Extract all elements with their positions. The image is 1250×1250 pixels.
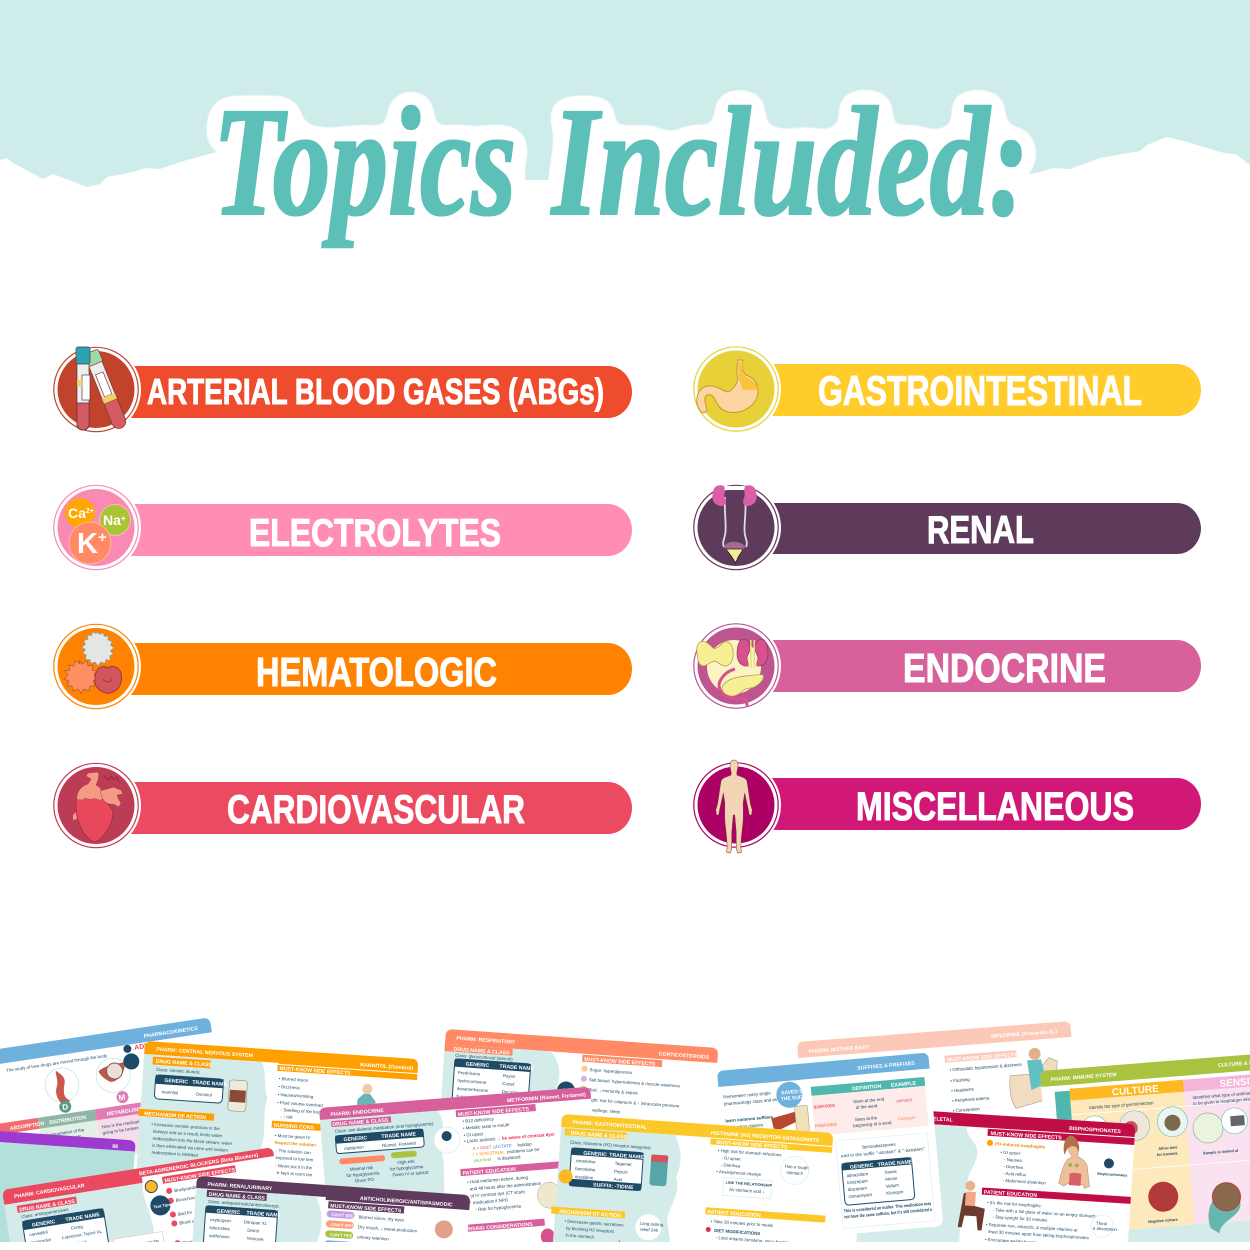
card: gastrointestinal (547, 1114, 833, 1250)
card: endocrine: Class: anti-diabetic medication (oral hypoglycemic) (335, 1121, 434, 1134)
card: immune system: PHARM: IMMUNE SYSTEM (1051, 1072, 1117, 1083)
card: suffixes and prefixes: Benzodiazepines (862, 1142, 897, 1150)
card: renal urinary: GENERIC (216, 1208, 241, 1216)
title: Included: (550, 75, 1029, 248)
card: gastrointestinal: • Decreases gastric secretions (564, 1218, 625, 1228)
card: endocrine: Riomet, Fortamet (382, 1140, 417, 1148)
card: immune system: Allow time (1158, 1145, 1178, 1151)
card: respiratory: Salt based: hypernatremia & muscle weakness (589, 1077, 681, 1089)
banner: arterial blood gases (130, 366, 632, 418)
icon: endocrine organs (691, 621, 781, 711)
card: central nervous system: • Nausea/vomiting (278, 1092, 314, 1099)
card: pharmacokinetics: M (118, 1093, 126, 1103)
card: respiratory: hydrocortisone (457, 1078, 487, 1085)
card: mother baby: • Peripheral edema (952, 1095, 990, 1103)
card: suffixes and prefixes: THE SUFFIX (780, 1094, 811, 1103)
card: mother baby: PHARM: MOTHER BABY (809, 1044, 870, 1055)
card: cardiovascular: Coreg (70, 1224, 84, 1231)
icon: stomach (691, 344, 781, 434)
icon: electrolyte bubbles: Na (103, 512, 121, 528)
card: pharmacokinetics: PHARMACOKINETICS (143, 1026, 199, 1040)
card: endocrine: • Metallic taste in mouth (463, 1122, 510, 1131)
card: suffixes and prefixes: alprazolam (846, 1171, 869, 1178)
card: central nervous system: • Must be given IV (275, 1133, 311, 1140)
card: pharmacokinetics: How is the medication (101, 1118, 145, 1130)
card: renal urinary: PHARM: RENAL/URINARY (207, 1182, 273, 1192)
card: gastrointestinal: by blocking H2 receptors (566, 1226, 615, 1234)
card: purple back card (0, 1131, 136, 1242)
card: endocrine: NURSING CONSIDERATIONS (461, 1222, 534, 1233)
card: immune system: for bacteria (1157, 1151, 1179, 1157)
card: gastrointestinal: - GI upset (721, 1155, 742, 1162)
card: pharmacokinetics: Transportation of the (44, 1127, 85, 1138)
icon: blood tubes (51, 344, 141, 434)
card: gastrointestinal: GENERIC (583, 1151, 607, 1158)
card: respiratory: Salt: water & salt retention (586, 1117, 638, 1126)
banner: electrolytes (130, 504, 632, 556)
card: central nervous system: NURSING CONS (273, 1123, 315, 1131)
card: pharmacokinetics (0, 1018, 212, 1154)
card: renal urinary: ANTICHOLINERGIC/ANTISPASMODIC (360, 1196, 453, 1208)
card: renal urinary: CAN'T SEE (331, 1212, 354, 1219)
card: endocrine: • B12 deficiency (462, 1116, 495, 1124)
card: mother baby: MONITOR (955, 1137, 977, 1143)
card: gastrointestinal: As stomach acid ↓ (729, 1187, 765, 1194)
card: renal urinary: Vesicare (247, 1236, 264, 1242)
card: central nervous system: Inspect the solution (274, 1140, 316, 1148)
card: musculoskeletal: PO-induced esophagitis (995, 1141, 1046, 1149)
card: gastrointestinal: TRADE NAME (609, 1152, 644, 1161)
banner: endocrine (770, 640, 1201, 692)
icon: kidneys and bladder (691, 482, 781, 572)
card: endocrine: problems can be (507, 1147, 540, 1154)
card: gastrointestinal: SUFFIX: -TIDINE (593, 1182, 634, 1191)
card: endocrine: • Hold metformin before, during (467, 1175, 529, 1185)
card: central nervous system (136, 1041, 418, 1176)
card: gastrointestinal: HISTAMINE (H2) RECEPTOR ANTAGONISTS (711, 1130, 820, 1144)
card: respiratory: MUST-KNOW SIDE EFFECTS (584, 1057, 656, 1068)
card: endocrine: is displaced (497, 1154, 521, 1161)
card: pharmacokinetics: DISTRIBUTION (49, 1115, 87, 1126)
card: central nervous system: kidneys and as a result, limits water (153, 1129, 223, 1138)
card: gastrointestinal: Class: histamine (H2) receptor antagonist (570, 1140, 652, 1150)
card: central nervous system: PHARM: CENTRAL NERVOUS SYSTEM (156, 1047, 253, 1059)
card: gastrointestinal: LINK THE RELATIONSHIP (725, 1181, 773, 1188)
card: mother baby: • Headache (951, 1087, 975, 1093)
card: cardiovascular: Bradycardia (174, 1184, 198, 1193)
card: suffixes and prefixes (717, 1053, 943, 1244)
card: endocrine: • GI upset (463, 1131, 484, 1138)
card: central nervous system: - Swelling of the body, feet (281, 1107, 333, 1116)
label: hematologic: HEMATOLOGIC (256, 649, 497, 695)
card: endocrine: and 48 hours after the administration (470, 1181, 542, 1191)
card: central nervous system: • Dizziness (278, 1084, 301, 1090)
card: renal urinary: CAN'T PEE (330, 1232, 353, 1238)
card: central nervous system: MECHANISM OF ACTION (144, 1111, 206, 1121)
card: suffixes and prefixes: pharmacology class and as a (724, 1097, 781, 1107)
study card collage (0, 1017, 1250, 1250)
card: gastrointestinal: • Anxiety/mood change (716, 1169, 762, 1177)
card: musculoskeletal: - Take with a full glass of water on an empty stomach (993, 1207, 1096, 1219)
card: musculoskeletal: • It's the risk for esophagitis: (987, 1200, 1042, 1208)
card: gastrointestinal: • Take 30 minutes prior to meals (711, 1219, 774, 1228)
topic: hematologic (51, 622, 632, 712)
topic: cardiovascular (51, 760, 632, 850)
card: endocrine: MUST-KNOW SIDE EFFECTS (458, 1106, 530, 1118)
card: endocrine: - Risk for hypoglycemia (475, 1203, 522, 1212)
card: pharmacokinetics: drug through fluids (45, 1134, 82, 1144)
card: gastrointestinal: PATIENT EDUCATION (707, 1209, 761, 1219)
card: endocrine: I = INTESTINAL (473, 1150, 505, 1157)
card: central nervous system: reabsorption into the blood stream; water (152, 1136, 233, 1146)
card: suffixes and prefixes: lorazepam (847, 1178, 868, 1185)
card: endocrine (319, 1087, 602, 1250)
card: gastrointestinal: - Diarrhea (721, 1162, 741, 1169)
card: renal urinary: oxybutynin (210, 1217, 232, 1224)
card: respiratory: TRADE NAME (499, 1064, 535, 1072)
card: purple back card: 88 (112, 1144, 118, 1150)
card: endocrine: METFORMIN (Riomet, Fortamet) (507, 1092, 586, 1104)
card: cardiovascular: DRUG NAME & CLASS (19, 1199, 76, 1213)
card: suffixes and prefixes: Klonopin (886, 1189, 904, 1196)
card: endocrine: buildup (517, 1141, 532, 1148)
icon: electrolyte bubbles: K (77, 528, 98, 560)
card: musculoskeletal: least 30 minutes apart from taking bisphosphonates (988, 1229, 1090, 1240)
card: gastrointestinal: famotidine (575, 1166, 596, 1173)
card: endocrine: for hypoglycemia (346, 1170, 380, 1178)
card: musculoskeletal: MUST-KNOW SIDE EFFECTS (990, 1131, 1062, 1141)
card: gastrointestinal: nizatidine (574, 1174, 594, 1180)
card: central nervous system: DRUG NAME & CLASS (155, 1059, 212, 1069)
card: immune system: Sample is looked at (1203, 1149, 1239, 1155)
card: suffixes and prefixes: of the word (855, 1103, 878, 1110)
card: suffixes and prefixes: Remember! many single (723, 1090, 771, 1100)
card: central nervous system: • Increases osmotic pressure in the (151, 1122, 220, 1131)
card: musculoskeletal: PATIENT EDUCATION (984, 1190, 1038, 1199)
card: gastrointestinal: PHARM: GASTROINTESTINAL (572, 1120, 648, 1131)
card: renal urinary: tolterodine (209, 1225, 231, 1231)
banner: miscellaneous (770, 778, 1201, 830)
topic: miscellaneous (691, 760, 1201, 853)
card: respiratory: Sleep/legs: sleep (587, 1107, 621, 1114)
card: pharmacokinetics: The study of how drugs are moved through the body (6, 1053, 108, 1073)
card: respiratory: Rayos (503, 1073, 516, 1079)
card: respiratory: the 5 S's (560, 1088, 576, 1094)
card: mother baby: • Constipation (953, 1106, 981, 1113)
topic: renal (691, 482, 1201, 572)
card: cardiovascular: metoprolol (30, 1237, 51, 1245)
card: suffixes and prefixes: GENERIC (850, 1163, 874, 1171)
card: endocrine: Given IV or subcut (392, 1170, 429, 1177)
icon: electrolyte bubbles: Ca (68, 505, 86, 521)
card: cardiovascular: Blood sugar (179, 1217, 203, 1226)
card: suffixes and prefixes: learn common suffixes (725, 1114, 774, 1123)
card: endocrine: for hypoglycemia (390, 1164, 424, 1172)
card: renal urinary: CAN'T SPIT (331, 1222, 355, 1229)
card: central nervous system: - Never put it in the (275, 1163, 313, 1170)
card: musculoskeletal: BISPHOSPHONATES (1069, 1126, 1121, 1135)
label: gastrointestinal: GASTROINTESTINAL (818, 367, 1142, 414)
topic: arterial blood gases (51, 344, 632, 434)
card: cardiovascular: Lopressor, Toprol XL (62, 1229, 103, 1240)
card: cardiovascular: Class: antihypertensives (21, 1207, 70, 1219)
card: musculoskeletal (856, 1107, 1135, 1250)
card: pharmacokinetics: D (62, 1102, 69, 1112)
card: gastrointestinal: stomach (786, 1170, 804, 1176)
card: cardiovascular: Bad for (178, 1210, 193, 1217)
banner: renal (770, 503, 1201, 554)
card: musculoskeletal: • Encourage weight bearing exercises (985, 1237, 1059, 1246)
icon: electrolyte bubbles (51, 482, 141, 572)
icon: blood cells (51, 622, 141, 712)
card: suffixes and prefixes: Xanax (884, 1169, 898, 1175)
card: musculoskeletal: • GI upset: (1000, 1150, 1021, 1156)
card: gastrointestinal: DIET MODIFICATIONS (714, 1228, 760, 1236)
banner: gastrointestinal (770, 364, 1201, 416)
card: gastrointestinal: cimetidine (576, 1158, 596, 1164)
card: immune system: CULTURE (1112, 1084, 1160, 1098)
card: renal urinary: solifenacin (209, 1233, 230, 1239)
card: renal urinary: Class: antispasmodic/anticholinergic (208, 1199, 280, 1209)
card: mother baby: NURSING CONSIDERATIONS (954, 1121, 1027, 1132)
card: immune system (1040, 1049, 1250, 1250)
card: mother baby: • Flushing (950, 1077, 970, 1083)
banner: cardiovascular (130, 782, 632, 834)
card: cardiovascular: Bronchoconstriction (175, 1192, 215, 1203)
card: endocrine: metformin (344, 1145, 364, 1151)
card: musculoskeletal: - Acid reflux (1003, 1171, 1027, 1177)
card: cardiovascular: PHARM: CARDIOVASCULAR (14, 1183, 85, 1200)
card: renal urinary: DRUG NAME & CLASS (209, 1192, 266, 1202)
card: respiratory: GENERIC (465, 1061, 490, 1069)
icon: electrolyte bubbles: + (98, 529, 107, 546)
card: cardiovascular: Blood (182, 1239, 195, 1245)
card: suffixes and prefixes: DEFINITION (852, 1084, 882, 1092)
card: suffixes and prefixes: diazepam (848, 1185, 867, 1192)
card: suffixes and prefixes: Captopril (898, 1115, 916, 1121)
icon: human body (691, 760, 781, 853)
card: central nervous system: - ↑ HR (280, 1114, 293, 1120)
card: central nervous system: is then eliminated via urine and sodium (152, 1143, 228, 1153)
card: cardiovascular (2, 1148, 277, 1242)
card: respiratory: dexamethasone (457, 1086, 489, 1093)
card: suffixes and prefixes: EXAMPLE (891, 1081, 917, 1089)
card: musculoskeletal: - Diarrhea (1003, 1164, 1024, 1170)
card: renal urinary: urinary retention (357, 1234, 390, 1242)
title: Topics (213, 75, 516, 248)
card: gastrointestinal: - Limit irritants (smoking, spicy foods) (716, 1235, 789, 1245)
card: gastrointestinal: Has a tough (785, 1164, 809, 1170)
card: cardiovascular: BETA-ADRENERGIC BLOCKERS (Beta Blockers) (139, 1153, 259, 1177)
card: central nervous system: Class: osmotic diuretic (156, 1067, 201, 1075)
card: endocrine: your liver (473, 1157, 492, 1163)
card: respiratory: Sugar: hyperglycemia (589, 1067, 633, 1075)
card: respiratory: Cortef (502, 1081, 515, 1087)
card: suffixes and prefixes: atenolol (896, 1097, 912, 1103)
card: gastrointestinal: MUST-KNOW SIDE EFFECTS (716, 1140, 788, 1151)
card: mother baby: NIFEDIPINE (Procardia XL) (991, 1029, 1058, 1040)
card: suffixes and prefixes: medication classes. (726, 1122, 764, 1130)
label: cardiovascular: CARDIOVASCULAR (227, 788, 525, 832)
card: musculoskeletal: PHARM: MUSCULOSKELETAL (877, 1113, 954, 1124)
card: musculoskeletal: • Separate iron, antacids, & multiple vitamins at (986, 1222, 1078, 1233)
card: endocrine: GENERIC (343, 1135, 368, 1143)
card: immune system: Negative culture (1148, 1218, 1178, 1224)
card: respiratory: Decadron (502, 1089, 521, 1095)
card: musculoskeletal: Think (1096, 1221, 1108, 1226)
card: respiratory: DRUG NAME & CLASS (453, 1047, 510, 1057)
card: respiratory: fluticasone (456, 1094, 478, 1100)
card: endocrine: be aware of contrast dye! (502, 1132, 555, 1141)
title (213, 75, 1029, 248)
card: endocrine: of IV contrast dye (CT scan) (470, 1189, 526, 1198)
card: endocrine: TRADE NAME (381, 1131, 417, 1140)
card: suffixes and prefixes: This is considered an outlier. This medication may (843, 1201, 932, 1213)
card: mother baby: • Orthostatic hypotension & dizziness (949, 1062, 1023, 1072)
card: immune system: Identify the type of germ/infection (1089, 1100, 1154, 1110)
card: suffixes and prefixes: PREFIXES (815, 1122, 837, 1129)
card: musculoskeletal: Bisphosphonates (1097, 1172, 1127, 1178)
icon: electrolyte bubbles: + (121, 514, 126, 523)
card: central nervous system: MANNITOL (Osmitrol) (360, 1062, 414, 1072)
card: endocrine: • Lactic acidosis → (464, 1136, 501, 1144)
card: suffixes and prefixes: Seen at the (855, 1115, 878, 1122)
card: suffixes and prefixes: TRADE NAME (878, 1159, 913, 1168)
icon: electrolyte bubbles: 2+ (86, 508, 94, 515)
card: suffixes and prefixes: Seen at the end (853, 1097, 885, 1104)
banner: hematologic (130, 643, 632, 695)
card: suffixes and prefixes: Valium (885, 1183, 899, 1189)
card: gastrointestinal: Axid (613, 1177, 623, 1182)
card: respiratory: Skin: gut distension & mood swings (585, 1127, 655, 1137)
card: cardiovascular: Test Tips (153, 1202, 172, 1209)
card: suffixes and prefixes: SUFFIXES (813, 1103, 835, 1110)
card: cardiovascular: Beta blockers can be (118, 1238, 160, 1249)
card: renal urinary: Dry mouth, ↓ sweat production (358, 1224, 418, 1234)
card: central nervous system: GENERIC (164, 1078, 188, 1085)
card: respiratory: Sight: risk for cataracts & ↑ intraocular pressure (587, 1097, 680, 1109)
card: endocrine: STOP (459, 1200, 471, 1206)
card: pharmacokinetics: ADME (134, 1042, 156, 1052)
card: mother baby: - Uterine contractions, frequency & duration (960, 1138, 1046, 1150)
card: gastrointestinal: Pepcid (614, 1169, 628, 1175)
card: respiratory: CORTICOSTEROIDS (659, 1051, 710, 1061)
card: gastrointestinal: MECHANISM OF ACTION (559, 1209, 621, 1219)
card: cardiovascular: MUST-KNOW SIDE EFFECTS (164, 1167, 236, 1184)
background: pale teal mountain sky (0, 0, 1250, 187)
card: suffixes and prefixes: SUFFIXES & PREFIXES (857, 1061, 916, 1072)
card: endocrine: medication if NPO (473, 1197, 509, 1205)
card: musculoskeletal: - Nausea (1004, 1157, 1022, 1163)
card: pharmacokinetics: going to be broken (102, 1125, 139, 1135)
label: arterial blood gases: ARTERIAL BLOOD GASES (ABGs) (147, 371, 604, 412)
card: suffixes and prefixes: clonazepam (848, 1192, 873, 1199)
card: pharmacokinetics: ABSORPTION (10, 1121, 45, 1132)
card: musculoskeletal: - Abdominal distention (1003, 1178, 1046, 1186)
card: gastrointestinal: Long lasting (639, 1221, 664, 1227)
card: respiratory: Flovent (501, 1097, 517, 1103)
card: respiratory: Risk: ↓ immunity & sepsis (588, 1087, 639, 1096)
label: miscellaneous: MISCELLANEOUS (856, 785, 1134, 829)
card: endocrine: A = FAST (472, 1145, 492, 1151)
card: gastrointestinal: relief 24h (640, 1227, 659, 1233)
card: endocrine: PATIENT EDUCATION (462, 1167, 516, 1177)
card: central nervous system: TRADE NAME (192, 1080, 228, 1088)
card: endocrine: Given PO (355, 1177, 375, 1183)
topic: endocrine (691, 621, 1201, 711)
card: endocrine: PHARM: ENDOCRINE (330, 1108, 385, 1118)
card: cardiovascular: TRADE NAME (65, 1212, 101, 1223)
card: endocrine: DRUG NAME & CLASS (332, 1118, 389, 1128)
card: renal urinary (192, 1176, 470, 1242)
card: suffixes and prefixes: not have the same suffixes, but it's still considered a (844, 1207, 933, 1219)
card: cardiovascular: carvedilol (29, 1229, 48, 1237)
card: mother baby: MUST-KNOW SIDE EFFECTS (947, 1052, 1019, 1064)
card: pharmacokinetics: METABOLISM (106, 1107, 141, 1118)
card: suffixes and prefixes: SAVED BY (781, 1088, 807, 1096)
card: central nervous system: • Fluid volume overload (277, 1100, 324, 1108)
card: gastrointestinal: DRUG NAME & CLASS (570, 1131, 627, 1141)
card: suffixes and prefixes: Ativan (885, 1176, 898, 1182)
card: gastrointestinal: Tagamet (615, 1161, 632, 1167)
topic: electrolytes (51, 482, 632, 572)
icon: heart (51, 760, 141, 850)
card: gastrointestinal: in the stomach (565, 1233, 595, 1240)
card: central nervous system: - The solution can (276, 1148, 312, 1155)
card: central nervous system: mannitol (162, 1089, 178, 1095)
card: renal urinary: Ditropan XL (244, 1219, 268, 1226)
card: respiratory (441, 1029, 718, 1114)
card: respiratory: Prednisone (458, 1070, 481, 1077)
label: endocrine: ENDOCRINE (903, 645, 1106, 691)
label: renal: RENAL (927, 509, 1034, 552)
card: central nervous system: • Blurred vision (279, 1076, 309, 1083)
card: musculoskeletal: - Stay upright for 30 minutes (992, 1214, 1048, 1223)
card: respiratory: Class: glucocorticoid (steroid) (455, 1053, 513, 1062)
card: endocrine: LACTATE (492, 1143, 512, 1149)
card: suffixes and prefixes: beginning of a word (853, 1120, 892, 1128)
card: central nervous system: reabsorption is inhibited (151, 1150, 199, 1158)
card: central nervous system: Osmitrol (195, 1091, 212, 1098)
card: renal urinary: Blurred vision, dry eyes (358, 1214, 405, 1223)
card: gastrointestinal: • High risk for stomach infections (718, 1148, 782, 1157)
card: renal urinary: TRADE NAME (246, 1211, 282, 1219)
card: renal urinary: Detrol (247, 1228, 259, 1233)
card: central nervous system: be kept at room ten (274, 1170, 313, 1177)
card: central nervous system: MUST-KNOW SIDE EFFECTS (279, 1066, 351, 1077)
card: endocrine: Minimal risk (350, 1165, 374, 1172)
card: suffixes and prefixes: end in the suffix "-azolam" & "-azepam" (841, 1146, 925, 1159)
card: mother baby (798, 1021, 1072, 1112)
label: electrolytes: ELECTROLYTES (249, 512, 501, 555)
card: central nervous system: exposed to low tem (275, 1155, 314, 1162)
card: renal urinary: MUST-KNOW SIDE EFFECTS (330, 1203, 402, 1214)
card: cardiovascular: GENERIC (31, 1219, 56, 1229)
card: respiratory: PHARM: RESPIRATORY (456, 1036, 516, 1046)
card: musculoskeletal: a absorption (1093, 1226, 1118, 1232)
card: endocrine: High risk (397, 1159, 416, 1165)
topic: gastrointestinal (691, 344, 1201, 434)
card: cardiovascular: Inderal (73, 1239, 87, 1246)
